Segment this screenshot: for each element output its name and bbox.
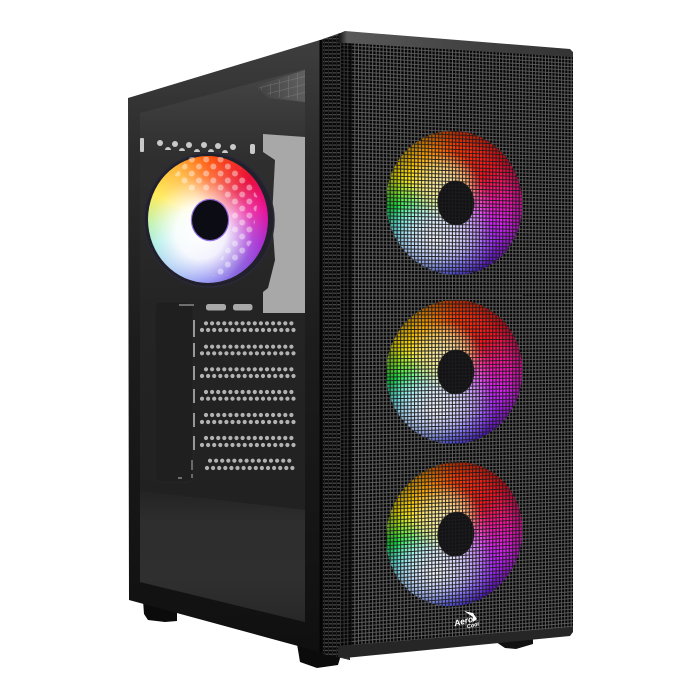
mesh grid: [340, 41, 573, 648]
front fan top: [386, 128, 523, 275]
bottom band: [338, 627, 573, 658]
corner dark edge: [320, 40, 322, 652]
perforated ventilation rows: [202, 323, 298, 468]
foot: left rear: [143, 600, 177, 622]
logo text: Aero: [453, 614, 474, 628]
expansion slot bars: [178, 305, 194, 478]
top cap: [338, 31, 573, 57]
front fan bottom: [386, 459, 523, 611]
front mesh panel: [340, 41, 573, 648]
top vent holes: [140, 138, 255, 154]
glass reflection: [255, 70, 305, 102]
side panel frame: [128, 33, 340, 658]
logo subtext: Cool: [466, 622, 480, 630]
side fan hub: [192, 200, 228, 240]
glass window: [140, 69, 305, 622]
fan frame ring: [144, 153, 274, 287]
glass reflection mesh: [258, 70, 305, 100]
foot: front right: [493, 636, 533, 649]
light rear cutout: [263, 134, 305, 313]
left edge shade: [340, 41, 352, 648]
foot: front left: [297, 644, 341, 668]
lower shroud: [140, 491, 305, 622]
logo swoosh: [464, 611, 477, 622]
side RGB fan: [148, 156, 268, 283]
brand logo: [453, 611, 480, 630]
cable openings: [206, 304, 252, 310]
corner bevel mesh: [323, 33, 350, 660]
front fan middle: [386, 300, 523, 446]
cable management panel: [155, 302, 193, 482]
